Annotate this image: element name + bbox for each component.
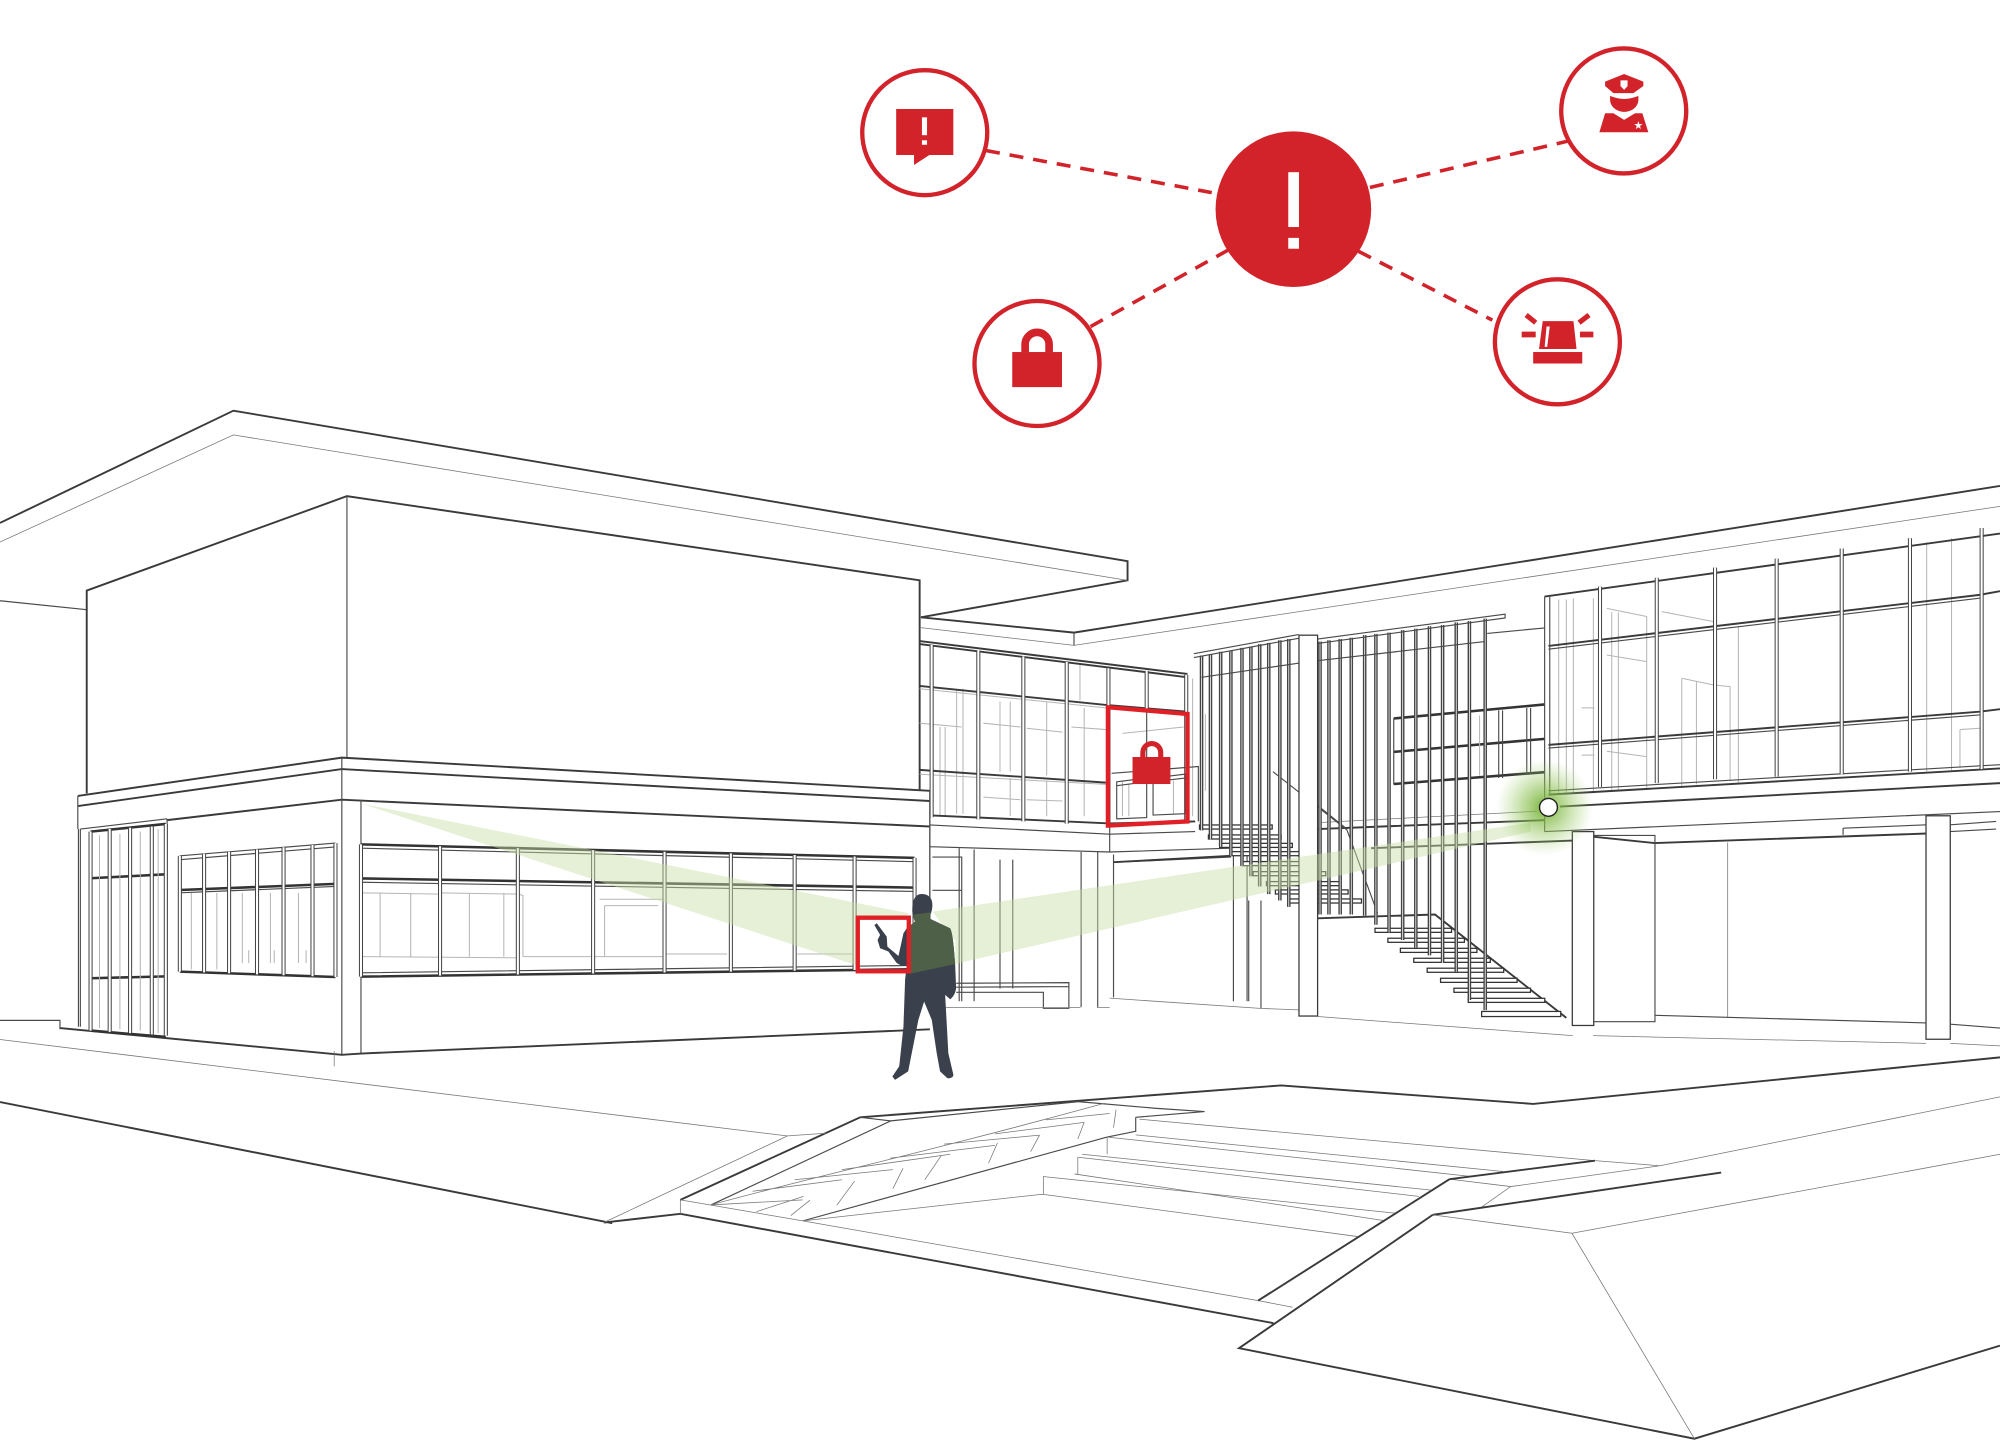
central wing: roof lines bbox=[920, 486, 2000, 645]
left building: roof and upper block bbox=[0, 411, 1128, 793]
left building: corner glazing bbox=[91, 824, 166, 1037]
person with gun bbox=[874, 894, 956, 1080]
icon: siren bbox=[1495, 279, 1620, 404]
central wing: upper glazing bbox=[920, 641, 1231, 1008]
left building: side windows bbox=[180, 843, 335, 977]
red detection frame: gun bbox=[858, 918, 909, 971]
staircase: lower run treads bbox=[1318, 915, 1566, 1018]
plaza: raised planter wedge bbox=[1239, 1154, 2000, 1439]
main column at stair bbox=[1299, 635, 1318, 1016]
left building: front windows bbox=[361, 844, 915, 977]
right wing: upper glazing bbox=[1545, 528, 2000, 832]
green camera beam: from camera to person bbox=[932, 823, 1531, 964]
right wing: mid windows behind louvres bbox=[1273, 704, 1573, 913]
left building: fascia band and walls bbox=[0, 758, 930, 1136]
central wing: lower columns and bench bbox=[930, 848, 1318, 1011]
icon: message alert bbox=[862, 70, 987, 195]
icon: central alert bbox=[1216, 131, 1371, 287]
camera sensor bbox=[1540, 798, 1557, 816]
red detection frame: locked door bbox=[1108, 707, 1198, 826]
icon: padlock bbox=[974, 301, 1099, 426]
camera glow bbox=[1496, 759, 1593, 856]
icon: police officer: ★ bbox=[1634, 119, 1643, 132]
icon: padlock on door bbox=[1133, 744, 1170, 784]
green camera beam: to left window corner bbox=[361, 804, 908, 966]
plaza: entrance steps bbox=[803, 1097, 2000, 1307]
right wing: slab and columns bbox=[1318, 783, 2000, 1046]
plaza: sunken ramp with hatching bbox=[680, 1102, 1205, 1221]
staircase: upper run treads bbox=[1199, 825, 1361, 903]
vertical louvres and rail bbox=[1194, 614, 1505, 1010]
dashed connectors bbox=[986, 140, 1571, 327]
plaza: ground edges bbox=[0, 1057, 2000, 1323]
icon: police officer bbox=[1561, 48, 1686, 173]
